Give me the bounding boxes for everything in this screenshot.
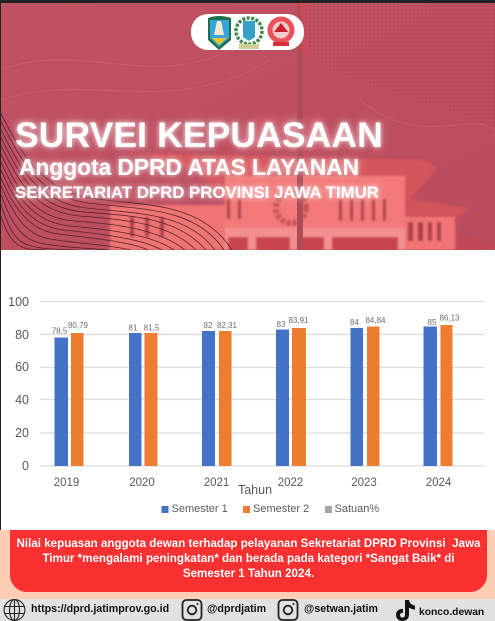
callout: Timur *mengalami peningkatan* dan berada pada kategori *Sangat Baik* di bbox=[42, 552, 455, 565]
bar chart bbox=[8, 295, 484, 515]
callout: Nilai kepuasan anggota dewan terhadap pelayanan Sekretariat DPRD Provinsi Jawa bbox=[17, 537, 480, 550]
value labels: 78,5 bbox=[52, 326, 68, 336]
callout: Semester 1 Tahun 2024. bbox=[183, 567, 314, 580]
y axis labels: 0 bbox=[22, 459, 29, 473]
tiktok handle: konco.dewan bbox=[419, 606, 484, 618]
icon: instagram bbox=[278, 599, 298, 621]
y axis labels: 40 bbox=[15, 393, 29, 407]
icon: tiktok bbox=[396, 600, 415, 621]
emblem: DPRD wreath bbox=[236, 18, 262, 49]
panel: header banner bbox=[0, 0, 495, 250]
value labels: 82,31 bbox=[217, 321, 238, 330]
bars semester 2 bbox=[71, 325, 452, 466]
value labels: 86,13 bbox=[439, 314, 460, 322]
value labels: 83 bbox=[277, 320, 286, 329]
value labels: 84 bbox=[350, 318, 359, 327]
x axis labels: 2022 bbox=[278, 477, 303, 489]
value labels bbox=[52, 314, 460, 336]
value labels: 85 bbox=[428, 318, 437, 327]
x axis labels: 2020 bbox=[129, 477, 155, 489]
website: https://dprd.jatimprov.go.id bbox=[31, 603, 169, 615]
legend: Satuan% bbox=[334, 503, 379, 515]
y axis labels bbox=[8, 295, 29, 473]
logo pill bbox=[191, 14, 304, 50]
x axis labels bbox=[54, 477, 452, 489]
x axis title: Tahun bbox=[238, 483, 272, 497]
legend: Semester 2 bbox=[253, 503, 309, 515]
value labels: 83,91 bbox=[288, 316, 309, 325]
value labels: 80,79 bbox=[68, 321, 89, 330]
instagram setwan: @setwan.jatim bbox=[304, 603, 378, 615]
x axis labels: 2021 bbox=[204, 477, 229, 489]
logos: three emblems bbox=[208, 16, 294, 50]
value labels: 81 bbox=[129, 324, 138, 332]
x axis labels: 2019 bbox=[54, 477, 79, 489]
value labels: 82 bbox=[204, 321, 213, 330]
y axis labels: 80 bbox=[15, 328, 29, 342]
instagram dprd: @dprdjatim bbox=[207, 603, 266, 615]
value labels: 84,84 bbox=[365, 316, 386, 325]
value labels: 81,5 bbox=[144, 324, 160, 332]
emblem: red seal bbox=[268, 16, 294, 46]
subtitle line 1: Anggota DPRD ATAS LAYANAN bbox=[19, 154, 359, 180]
flagpole bbox=[297, 5, 303, 250]
left dark edge bbox=[0, 0, 1, 621]
x axis labels: 2024 bbox=[426, 477, 452, 489]
y axis labels: 60 bbox=[15, 360, 29, 374]
x axis labels: 2023 bbox=[351, 477, 377, 489]
icon: globe bbox=[4, 599, 26, 621]
illustration: building, flagpole and patterns bbox=[1, 3, 495, 250]
social footer bar bbox=[0, 599, 495, 621]
title: SURVEI KEPUASAAN bbox=[15, 115, 383, 155]
y axis labels: 20 bbox=[15, 426, 29, 440]
subtitle line 2: SEKRETARIAT DPRD PROVINSI JAWA TIMUR bbox=[15, 183, 379, 202]
icon: instagram bbox=[182, 599, 202, 621]
callout bbox=[10, 530, 487, 592]
wave lines bbox=[0, 112, 232, 250]
emblem: Jawa Timur shield bbox=[208, 16, 231, 50]
bars semester 1 bbox=[54, 326, 437, 466]
y axis labels: 100 bbox=[8, 295, 29, 309]
building bbox=[110, 115, 495, 250]
legend bbox=[162, 503, 379, 515]
footer background band bbox=[0, 530, 495, 599]
legend: Semester 1 bbox=[172, 503, 228, 515]
top dark edge bbox=[0, 0, 495, 3]
